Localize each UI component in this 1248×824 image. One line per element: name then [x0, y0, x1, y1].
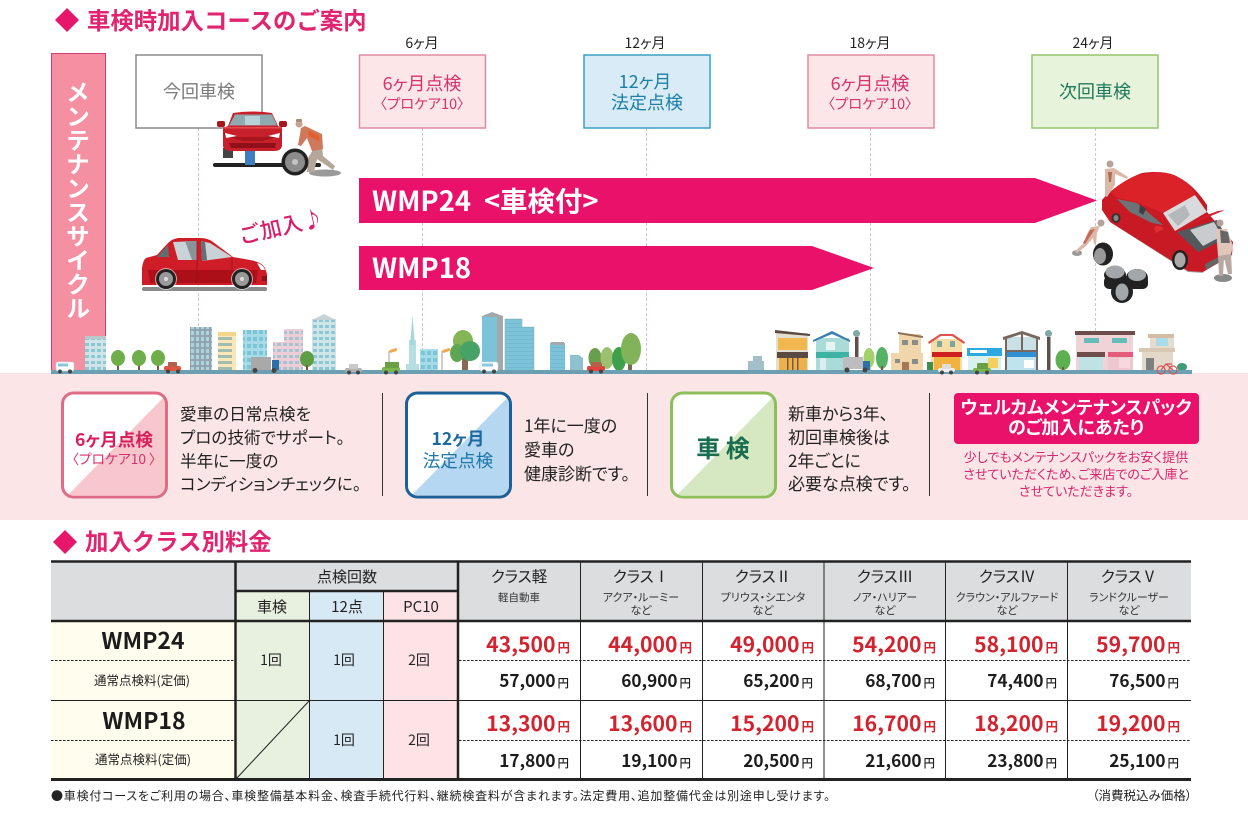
WMP18 regular prices: 23,800円 [987, 747, 1057, 772]
legend: 6 month description: プロの技術でサポート。 [180, 424, 345, 448]
class headers: クラスⅠ [613, 565, 669, 587]
month labels: 24ヶ月 [1073, 33, 1113, 53]
road vehicles [56, 357, 1177, 374]
inspection count headers [257, 566, 439, 617]
box: 12 month statutory check: 法定点検 [611, 89, 683, 115]
pink info band background [0, 373, 1248, 520]
WMP18 member prices: 13,300円 [486, 707, 570, 738]
WMP24 member prices: 43,500円 [486, 628, 570, 659]
WMP18 regular prices: 17,800円 [499, 747, 569, 772]
WMP18 member prices: 13,600円 [608, 707, 692, 738]
legend dividers [382, 393, 930, 496]
WMP24 member prices: 49,000円 [730, 628, 814, 659]
WMP18 member prices [486, 707, 1180, 738]
class headers: クラスⅣ [979, 565, 1035, 587]
legend: 12 month description: 愛車の [524, 436, 574, 461]
WMP18 regular prices: 25,100円 [1109, 747, 1179, 772]
WMP24 regular prices: 68,700円 [865, 667, 935, 692]
road strip [51, 370, 1192, 374]
WMP24 regular prices: 76,500円 [1109, 667, 1179, 692]
box: next inspection [1032, 55, 1158, 128]
legend: shaken description: 初回車検後は [788, 424, 890, 448]
WMP24 regular prices: 74,400円 [987, 667, 1057, 692]
inspection count headers: 点検回数 [317, 566, 377, 587]
legend: 12 month check card [406, 393, 510, 497]
legend: shaken description: 2年ごとに [788, 447, 861, 472]
class headers: など [1118, 602, 1140, 618]
illustration: car on lift with mechanic [213, 112, 341, 176]
house: tan [891, 332, 923, 371]
callout: welcome maintenance pack: ウェルカムメンテナンスパック [960, 394, 1192, 420]
month labels: 6ヶ月 [405, 33, 439, 53]
legend: shaken card: 車 検 [696, 429, 750, 464]
legend: 6 month description: 半年に一度の [180, 448, 278, 472]
class headers: ランドクルーザー [1089, 589, 1169, 605]
table rules [51, 562, 1191, 780]
legend: 6 month description: 愛車の日常点検を [180, 401, 311, 425]
timeline dashed guide lines [198, 128, 1096, 370]
panel: maintenance cycle side bar: メンテナンスサイクル [60, 80, 96, 320]
class headers: ノア・ハリアー [853, 589, 917, 605]
legend: 12 month check card: 12ヶ月 [432, 426, 484, 451]
table row label background [51, 621, 235, 779]
legend: 6 month check card: 6ヶ月点検 [75, 427, 153, 452]
inspection counts: 1回 [333, 650, 355, 670]
footnote: ●車検付コースをご利用の場合、車検整備基本料金、検査手続代行料、継続検査料が含まれます。法定費用、追加整備代金は別途申し受けます。 [51, 787, 830, 804]
class headers: クラス軽 [491, 565, 548, 587]
row labels: WMP18 [102, 702, 186, 736]
inspection count column fills [236, 592, 458, 779]
WMP18 member prices: 16,700円 [852, 707, 936, 738]
month labels: 18ヶ月 [850, 33, 890, 53]
house: orange [775, 330, 810, 371]
arrow: WMP18: WMP18 [372, 246, 471, 286]
WMP24 regular prices [499, 667, 1179, 692]
box: 18 month check: 〈プロケア10〉 [828, 93, 912, 114]
box: current inspection: 今回車検 [163, 78, 235, 104]
shop: blue [967, 348, 1002, 371]
box: 6 month check [360, 55, 486, 128]
illustration: red car service with mechanics and tires [1072, 160, 1233, 303]
WMP18 member prices: 18,200円 [974, 707, 1058, 738]
box: next inspection: 次回車検 [1059, 78, 1131, 104]
legend: 6 month check card: 〈プロケア10 〉 [72, 448, 156, 468]
illustration: left cityscape [85, 312, 583, 371]
class headers: など [630, 602, 652, 618]
callout: welcome maintenance pack: させていただくため、ご来店でのご入庫と [963, 464, 1189, 483]
tax note: （消費税込み価格） [1092, 785, 1192, 804]
callout: welcome maintenance pack: させていただきます。 [1019, 481, 1133, 500]
legend: shaken description: 必要な点検です。 [788, 470, 911, 495]
class headers: プリウス・シエンタ [721, 589, 805, 605]
row labels: WMP24 [101, 622, 185, 656]
class headers: クラスⅢ [857, 565, 913, 587]
WMP24 regular prices: 60,900円 [621, 667, 691, 692]
box: 18 month check [808, 55, 934, 128]
legend: shaken description: 新車から3年、 [788, 400, 888, 425]
box: 6 month check: 〈プロケア10〉 [380, 93, 464, 114]
legend: shaken card [672, 393, 776, 497]
house: red roof shop [927, 334, 965, 371]
row labels [94, 622, 191, 768]
house: teal [813, 331, 850, 371]
legend: 12 month description: 健康診断です。 [524, 460, 630, 485]
WMP18 member prices: 19,200円 [1096, 707, 1180, 738]
inspection count headers: PC10 [403, 596, 439, 617]
legend: 12 month check card: 法定点検 [423, 447, 494, 473]
house: brown frame [1003, 331, 1040, 371]
box: 6 month check: 6ヶ月点検 [383, 70, 461, 96]
box: 18 month check: 6ヶ月点検 [831, 70, 909, 96]
legend: 12 month description: 1年に一度の [524, 412, 617, 437]
class headers: クラスⅤ [1101, 565, 1157, 587]
heading: course guide: 車検時加入コースのご案内 [87, 2, 367, 36]
class headers: など [752, 602, 774, 618]
inspection count headers: 12点 [331, 596, 363, 617]
inspection counts [260, 650, 430, 750]
inspection count headers: 車検 [257, 596, 287, 617]
month labels [405, 33, 1113, 53]
illustration: red car side view [142, 238, 267, 291]
table: price by class [51, 562, 1191, 780]
WMP18 regular prices: 20,500円 [743, 747, 813, 772]
WMP18 regular prices: 21,600円 [865, 747, 935, 772]
month labels: 12ヶ月 [625, 33, 665, 53]
box: 12 month statutory check [584, 55, 710, 128]
house: beige [1139, 334, 1175, 371]
class headers [491, 565, 1169, 618]
WMP18 regular prices [499, 747, 1179, 772]
illustration: central trees and road traffic [588, 333, 764, 371]
legend: 6 month description: コンディションチェックに。 [180, 471, 361, 495]
arrow: WMP18 [359, 246, 874, 290]
row labels: 通常点検料(定価) [94, 670, 190, 689]
arrow: WMP24 [359, 178, 1097, 223]
WMP24 member prices [486, 628, 1180, 659]
arrow: WMP24: WMP24 [372, 179, 471, 219]
WMP24 member prices: 44,000円 [608, 628, 692, 659]
legend: 6 month check card [62, 393, 166, 497]
class headers: クラスⅡ [735, 565, 791, 587]
callout: welcome maintenance pack: 少しでもメンテナンスパックをお安く提供 [964, 447, 1188, 466]
row labels: 通常点検料(定価) [95, 749, 191, 768]
class headers: アクア・ルーミー [603, 589, 679, 605]
heading: price by class: 加入クラス別料金 [85, 523, 272, 557]
WMP18 regular prices: 19,100円 [621, 747, 691, 772]
WMP18 member prices: 15,200円 [730, 707, 814, 738]
WMP24 member prices: 58,100円 [974, 628, 1058, 659]
house: pink [1075, 331, 1135, 371]
box: current inspection [136, 55, 262, 128]
box: 12 month statutory check: 12ヶ月 [619, 68, 671, 94]
class headers: など [874, 602, 896, 618]
illustration: right townscape houses [775, 330, 1187, 371]
WMP24 member prices: 54,200円 [852, 628, 936, 659]
inspection counts: 1回 [260, 650, 282, 670]
class headers: など [996, 602, 1018, 618]
inspection counts: 1回 [333, 730, 355, 750]
panel: maintenance cycle side bar [52, 54, 106, 374]
callout: welcome maintenance pack [954, 393, 1199, 500]
class headers: クラウン・アルファード [956, 589, 1058, 605]
inspection counts: 2回 [408, 650, 430, 670]
callout: welcome maintenance pack: のご加入にあたり [1008, 414, 1144, 440]
table header background [51, 562, 1191, 621]
callout: join note: ご加入♪ [236, 201, 326, 251]
WMP24 member prices: 59,700円 [1096, 628, 1180, 659]
arrow: WMP24: <車検付> [484, 179, 598, 219]
class headers: 軽自動車 [498, 590, 540, 605]
inspection counts: 2回 [408, 730, 430, 750]
WMP24 regular prices: 57,000円 [499, 667, 569, 692]
WMP24 regular prices: 65,200円 [743, 667, 813, 692]
